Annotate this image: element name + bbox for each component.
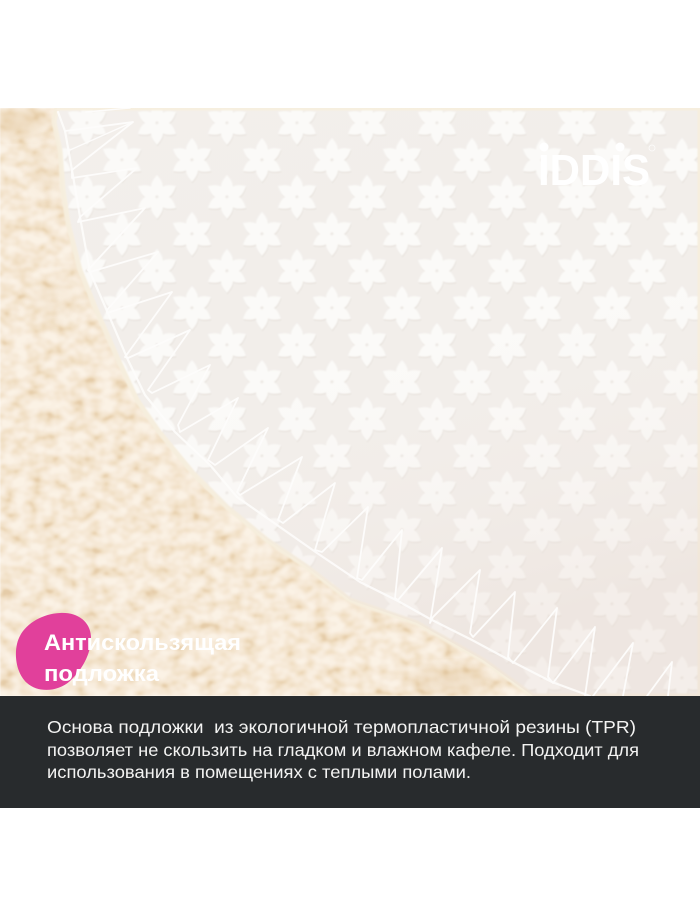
description text bbox=[47, 717, 639, 782]
icon: pink blob behind heading bbox=[16, 613, 91, 690]
logo: IDDIS: IDDIS bbox=[538, 146, 650, 195]
overlock stitching along the edge bbox=[58, 108, 672, 696]
textured rubber backing bbox=[54, 108, 700, 696]
description text: позволяет не скользить на гладком и влажном кафеле. Подходит для bbox=[47, 740, 639, 760]
panel: description bar bbox=[0, 696, 700, 808]
heading bbox=[44, 630, 241, 686]
photo: rug with rubber backing bbox=[0, 108, 700, 696]
fleece rug surface bbox=[0, 108, 529, 696]
heading: подложка bbox=[44, 661, 160, 686]
description text: использования в помещениях с теплыми полами. bbox=[47, 762, 471, 782]
description text: Основа подложки из экологичной термопластичной резины (TPR) bbox=[47, 717, 636, 737]
heading: Антискользящая bbox=[44, 630, 241, 655]
